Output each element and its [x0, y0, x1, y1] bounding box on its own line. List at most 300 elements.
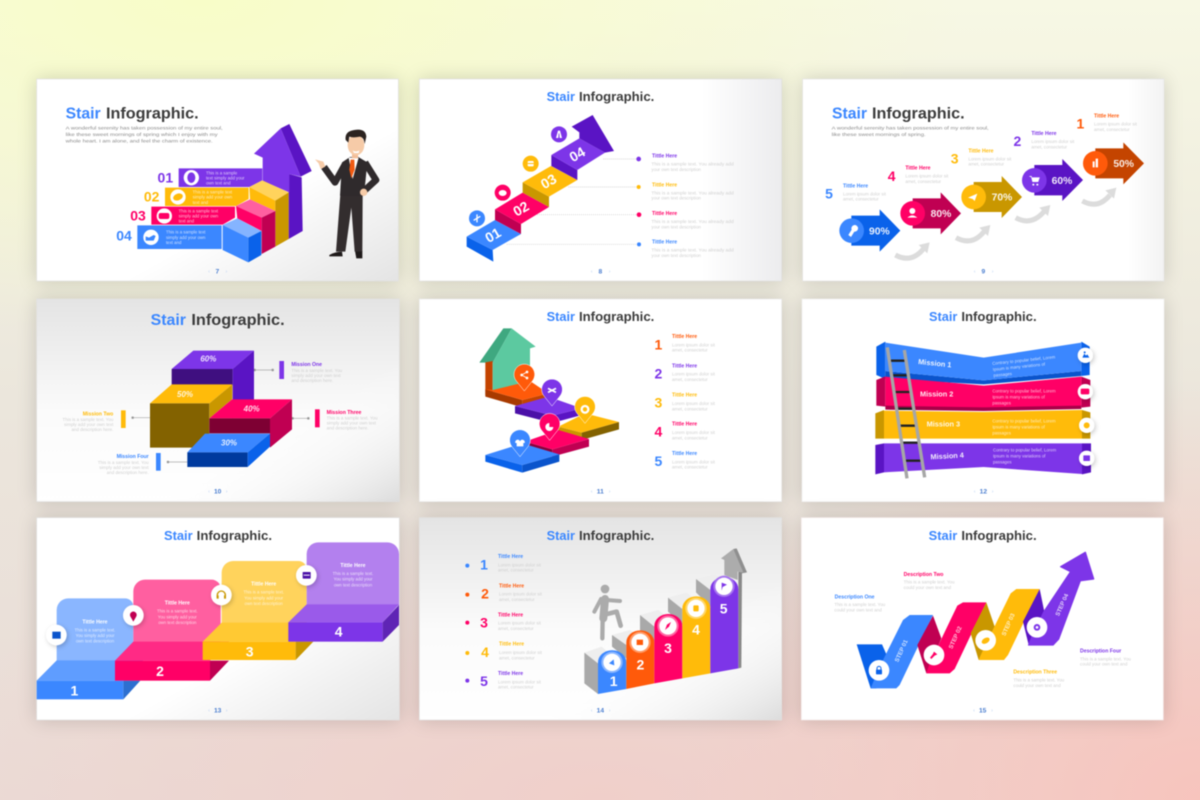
banner 03: text and — [179, 219, 195, 224]
label 2: Lorem ipsum dolor sit — [1031, 139, 1075, 144]
panel: slide 15 zigzag ribbon arrow — [801, 518, 1163, 720]
mission four: Mission Four — [117, 454, 149, 460]
3D block 40%: 40% — [243, 405, 260, 414]
page number: 9 — [981, 268, 985, 275]
label 3 — [951, 148, 1012, 167]
panel: slide 9 rising arrows — [803, 79, 1164, 281]
label 5: Tittle Here — [843, 183, 868, 189]
label 2: Tittle Here — [1031, 131, 1057, 137]
ribbon: mission 2: Contrary to popular belief, Lorem — [992, 388, 1056, 393]
item: purple: This is a sample text. You already add — [651, 162, 734, 167]
description three: could your own text and — [1013, 683, 1061, 688]
title — [547, 310, 654, 324]
banner 02: text and — [193, 200, 209, 205]
column 4 — [682, 596, 710, 678]
label 3: Tittle Here — [968, 148, 994, 154]
page number: › — [226, 708, 228, 714]
description text: A wonderful serenity has taken possession of my entire soul, — [832, 126, 989, 132]
step 2: This is a sample text. — [157, 609, 198, 614]
list item 3: amet, consectetur — [498, 626, 534, 631]
ribbon: mission 2: Mission 2 — [920, 389, 953, 398]
arrow 60%: 60% — [1052, 176, 1072, 187]
banner 04: This is a sample text — [166, 230, 206, 235]
mission one: simply add your own text — [291, 373, 341, 378]
title — [151, 312, 285, 329]
3D block 60% — [172, 351, 254, 418]
panel: slide 11 pin stairs — [419, 299, 782, 502]
ladder — [887, 347, 925, 478]
description text — [832, 126, 989, 138]
yellow step — [558, 413, 619, 440]
banner 01: 01 — [158, 170, 173, 186]
mission one — [279, 361, 343, 383]
page number: 8 — [598, 268, 602, 275]
arrow 90% — [839, 209, 900, 252]
title: Stair — [547, 310, 575, 324]
page number: 12 — [980, 488, 987, 495]
pink step — [525, 430, 589, 457]
ribbon: mission 4 — [875, 443, 1091, 474]
ribbon circle icons — [869, 617, 1047, 681]
item: blue: your own text description — [651, 253, 701, 258]
label 1: amet, consectetur — [1094, 127, 1130, 132]
curved grey arrows — [895, 188, 1116, 258]
purple step — [515, 397, 582, 423]
list item 2: 2 — [481, 585, 489, 601]
ribbon: mission 1: Mission 1 — [918, 357, 952, 369]
3D block 50%: 50% — [177, 390, 193, 399]
description two: Description Two — [904, 572, 943, 578]
list item 4: Lorem ipsum dolor sit — [672, 430, 716, 435]
list item 1: amet, consectetur — [498, 568, 534, 573]
title — [164, 529, 272, 543]
title: Stair — [547, 90, 575, 104]
step 4: own text description — [334, 582, 373, 587]
ribbon: mission 4: Contrary to popular belief, Lorem — [993, 448, 1057, 453]
3D block 60%: 60% — [200, 355, 216, 364]
page number: ‹ — [591, 269, 593, 275]
item: blue: This is a sample text. You already add — [651, 248, 734, 253]
title: Stair — [929, 310, 957, 324]
list item 2: amet, consectetur — [672, 377, 708, 382]
step 4: This is a sample text. — [333, 571, 373, 576]
circle icons — [46, 565, 317, 645]
step 3: 3 — [246, 643, 254, 659]
banner 03 — [130, 207, 235, 225]
mission three: and description here. — [327, 426, 369, 431]
arrow 70%: 70% — [992, 193, 1012, 204]
isometric stair with numbers: 02 — [510, 198, 532, 219]
list item 4: 4 — [654, 424, 662, 440]
step 4: You simply add your — [334, 577, 373, 582]
column 1 — [598, 650, 626, 694]
item: pink: This is a sample text. You already add — [651, 219, 734, 224]
ribbon step 03 — [971, 589, 1040, 660]
label 4: 4 — [888, 168, 896, 184]
banner 02: This is a sample text — [193, 190, 233, 195]
label 3: amet, consectetur — [968, 162, 1004, 167]
list item 4: 4 — [481, 644, 489, 660]
title: Infographic. — [191, 312, 285, 329]
connector lines — [507, 159, 639, 244]
panel: slide 7 stair with businessman — [37, 79, 398, 281]
list item 5: Lorem ipsum dolor sit — [498, 679, 542, 684]
step 3: own text description — [245, 601, 283, 606]
step 4: 4 — [335, 624, 343, 640]
list item 2: Tittle Here — [672, 363, 697, 369]
column 3: 3 — [664, 640, 672, 656]
label 5: amet, consectetur — [843, 197, 879, 202]
ribbon step 02: STEP 02 — [948, 625, 964, 650]
step 1: You simply add your — [76, 633, 115, 638]
list item 4: Tittle Here — [672, 422, 697, 428]
list item 3: Tittle Here — [498, 612, 523, 618]
3D block 40% — [209, 399, 292, 448]
3D block 30% — [187, 434, 270, 467]
page number — [591, 488, 611, 495]
page number: 10 — [214, 488, 222, 495]
mission two: Mission Two — [83, 411, 113, 417]
ribbon: mission 3: Mission 3 — [927, 420, 960, 429]
arrow 60% — [1022, 159, 1083, 201]
page number: 7 — [215, 268, 219, 275]
green arrow — [479, 328, 536, 395]
title: Infographic. — [961, 529, 1037, 543]
step 1: 1 — [70, 683, 78, 699]
label 2: amet, consectetur — [1031, 145, 1067, 150]
list item 4 — [654, 422, 716, 440]
panel: slide 8 diagonal stairs — [419, 79, 782, 281]
ribbon: mission 3: Contrary to popular belief, Lorem — [992, 419, 1056, 424]
title — [832, 105, 965, 122]
isometric stair with numbers: 01 — [482, 224, 504, 246]
mission three — [315, 409, 378, 431]
label 4: amet, consectetur — [905, 179, 941, 184]
list item 2 — [654, 363, 716, 382]
list item 5 — [465, 671, 542, 690]
ribbon step 01 — [857, 615, 933, 688]
list item 4: amet, consectetur — [499, 655, 535, 660]
mission three: simply add your own text — [327, 421, 377, 426]
3D block 50% — [150, 384, 232, 448]
description one — [834, 594, 886, 612]
businessman figure — [315, 130, 376, 258]
location pins — [510, 364, 595, 457]
ribbon: mission 2: passages — [992, 400, 1011, 405]
panel: slide 12 mission ribbons with ladder — [802, 299, 1164, 502]
title: Stair — [929, 529, 957, 543]
description one: could your own text and — [834, 607, 882, 612]
page number: › — [609, 708, 611, 714]
item: blue: Tittle Here — [652, 240, 677, 246]
title: Stair — [151, 312, 186, 329]
mission three: This is a sample text. You — [327, 416, 378, 421]
ribbon: mission 1: passages — [993, 371, 1012, 378]
step 1: own text description — [76, 639, 115, 644]
page number: ‹ — [591, 489, 593, 495]
title — [66, 105, 199, 122]
mission four: simply add your own text — [99, 465, 149, 470]
page number: ‹ — [973, 708, 975, 714]
mission two — [62, 410, 126, 432]
item: yellow — [637, 182, 734, 201]
label 3: 3 — [951, 150, 959, 166]
arrow 70% — [961, 176, 1022, 218]
title: Stair — [547, 529, 575, 543]
list item 2: Tittle Here — [499, 583, 524, 589]
page number — [208, 707, 228, 714]
list item 1: Lorem ipsum dolor sit — [498, 562, 542, 567]
page number: ‹ — [974, 489, 976, 495]
list item 3: Tittle Here — [672, 393, 697, 399]
page number: › — [225, 269, 227, 275]
item: pink: your own text description — [651, 224, 701, 229]
list item 5: Lorem ipsum dolor sit — [672, 459, 716, 464]
description three: This is a sample text. You — [1013, 678, 1065, 683]
list item 5: Tittle Here — [498, 671, 523, 677]
item: yellow: Tittle Here — [652, 182, 677, 188]
page number: › — [609, 269, 611, 275]
title — [929, 310, 1037, 324]
mission three: Mission Three — [327, 410, 361, 416]
page number: › — [992, 489, 994, 495]
page number — [208, 488, 228, 495]
ribbon: mission 1: Contrary to popular belief, Lorem — [992, 354, 1056, 366]
step 3: Tittle Here — [251, 582, 276, 588]
column 3 — [654, 614, 682, 683]
list item 5: 5 — [654, 453, 662, 469]
description four: This is a sample text. You — [1080, 656, 1131, 661]
mission one: and description here. — [291, 378, 333, 383]
step icons — [469, 126, 567, 226]
page number — [973, 707, 993, 714]
column 2: 2 — [636, 657, 644, 673]
description two: could your own text and — [904, 585, 952, 590]
ribbon step 04 arrow — [1023, 552, 1094, 645]
ribbon: mission 4: Mission 4 — [930, 451, 965, 461]
mission four: and description here. — [107, 470, 149, 475]
step 1: Tittle Here — [82, 619, 108, 625]
description one: This is a sample text. You — [834, 602, 886, 607]
ribbon: mission 1: Ipsum is many variations of — [993, 361, 1046, 372]
list item 3 — [465, 612, 542, 631]
title: Stair — [164, 529, 193, 543]
description text — [66, 126, 223, 145]
title: Stair — [832, 105, 867, 122]
panel: slide 13 card steps — [37, 518, 399, 720]
step 1 — [37, 598, 143, 699]
page number: › — [992, 269, 994, 275]
list item 5: amet, consectetur — [498, 685, 534, 690]
label 1: 1 — [1076, 115, 1084, 131]
list item 1: Tittle Here — [498, 554, 523, 560]
column 4: 4 — [692, 621, 700, 637]
title: Infographic. — [872, 105, 965, 122]
list item 4: amet, consectetur — [672, 435, 708, 440]
banner 03: simply add your own — [179, 214, 219, 219]
column 2 — [626, 630, 654, 689]
title: Infographic. — [579, 529, 654, 543]
list item 2: Lorem ipsum dolor sit — [499, 592, 543, 597]
list item 5 — [654, 451, 716, 470]
ribbon: mission 3: passages — [992, 431, 1011, 436]
page number — [974, 268, 994, 275]
step 2 — [115, 580, 229, 681]
ribbon: mission 2: Ipsum is many variations of — [992, 394, 1046, 399]
list item 2: 2 — [654, 365, 662, 381]
page number: › — [609, 489, 611, 495]
page number: 13 — [214, 707, 222, 714]
banner 01: This is a sample — [206, 170, 238, 175]
list item 3 — [654, 393, 716, 411]
page number — [591, 268, 611, 275]
pin icons — [515, 371, 588, 446]
grey stair walls and arrow — [584, 548, 747, 694]
title: Stair — [66, 105, 101, 122]
page number: 11 — [597, 488, 604, 495]
mission two: and description here. — [71, 427, 113, 432]
arrow 50% — [1083, 142, 1144, 184]
page number: › — [226, 489, 228, 495]
step 4: Tittle Here — [340, 563, 366, 569]
mission one: This is a sample text. You — [291, 368, 343, 373]
banner 03: This is a sample text — [179, 209, 219, 214]
step 4 — [288, 542, 399, 642]
list item 2 — [465, 583, 543, 602]
label 5: 5 — [825, 185, 833, 201]
title — [547, 90, 654, 104]
arrow 80%: 80% — [931, 209, 951, 220]
description four: could your own text and — [1080, 662, 1128, 667]
list item 4 — [465, 642, 543, 660]
label 3: Lorem ipsum dolor sit — [968, 156, 1012, 161]
description text: A wonderful serenity has taken possession of my entire soul, — [66, 126, 223, 132]
page number: ‹ — [208, 269, 210, 275]
page number: 14 — [597, 707, 604, 714]
climbing person — [594, 585, 621, 638]
ribbon: mission 4: Ipsum is many variations of — [993, 454, 1046, 459]
banner 01 — [158, 168, 262, 187]
ribbon: mission 3: Ipsum is many variations of — [992, 425, 1046, 430]
page number: › — [991, 708, 993, 714]
description three — [1013, 670, 1065, 688]
label 4: Tittle Here — [905, 166, 931, 172]
list item 1: Lorem ipsum dolor sit — [672, 342, 716, 347]
item: pink — [637, 211, 734, 229]
banner 02 — [144, 188, 249, 206]
list item 5: Tittle Here — [672, 451, 697, 457]
column 1: 1 — [610, 673, 618, 689]
item: purple: your own text description — [651, 167, 701, 172]
step 3: This is a sample text. — [243, 590, 284, 595]
label 1 — [1076, 114, 1138, 132]
item: yellow: This is a sample text. You already add — [651, 190, 734, 195]
ribbon: mission 4: passages — [993, 460, 1012, 465]
banner 01: text simply add your — [206, 176, 245, 181]
blue step — [485, 443, 559, 473]
page number: 15 — [979, 707, 987, 714]
list item 3: Lorem ipsum dolor sit — [498, 621, 542, 626]
column 5 — [710, 576, 738, 673]
description text: like these sweet mornings of spring. — [832, 132, 926, 138]
page number: ‹ — [208, 489, 210, 495]
isometric stair with numbers: 03 — [538, 170, 559, 192]
title: Infographic. — [961, 310, 1037, 324]
ribbon step 02 — [917, 602, 986, 673]
label 2: 2 — [1013, 133, 1021, 149]
ribbon step 04 arrow: STEP 04 — [1055, 593, 1071, 617]
description three: Description Three — [1013, 670, 1057, 676]
list item 1: 1 — [480, 556, 488, 572]
title — [547, 529, 654, 543]
isometric stair with numbers — [467, 115, 614, 262]
title: Infographic. — [579, 310, 654, 324]
3D block 30%: 30% — [221, 439, 237, 448]
list item 4: Tittle Here — [499, 642, 524, 648]
list item 3: 3 — [480, 615, 488, 631]
page number — [974, 488, 994, 495]
list item 2: Lorem ipsum dolor sit — [672, 372, 716, 377]
3D cube steps — [223, 180, 289, 262]
arrow 50%: 50% — [1113, 159, 1134, 170]
list item 2: amet, consectetur — [499, 597, 535, 602]
column 5: 5 — [720, 601, 728, 617]
banner 04: text and — [166, 240, 182, 245]
ribbon: mission 3 — [875, 410, 1090, 439]
step 2: 2 — [156, 663, 164, 679]
item: blue — [637, 240, 734, 258]
ribbon step 03: STEP 03 — [1001, 612, 1017, 637]
3D arrow — [254, 124, 312, 239]
banner 04: simply add your own — [166, 235, 206, 240]
list item 1: amet, consectetur — [672, 348, 708, 353]
page number — [591, 707, 611, 714]
label 4 — [888, 166, 949, 184]
list item 4: Lorem ipsum dolor sit — [499, 650, 543, 655]
item: purple — [636, 154, 734, 172]
banner 01: own text and — [206, 181, 231, 186]
step 2: You simply add your — [158, 614, 197, 619]
list item 3: Lorem ipsum dolor sit — [672, 401, 716, 406]
page number: ‹ — [591, 708, 593, 714]
description text: whole heart. I am alone, and feel the charm of existence. — [66, 139, 213, 145]
step 3: You simply add your — [244, 595, 284, 600]
mission four: This is a sample text. You — [98, 460, 149, 465]
label 2 — [1013, 131, 1075, 150]
label 4: Lorem ipsum dolor sit — [905, 174, 949, 179]
title — [929, 529, 1037, 543]
mission one: Mission One — [291, 362, 322, 368]
item: purple: Tittle Here — [652, 154, 677, 160]
banner 03: 03 — [130, 207, 146, 223]
label 1: Tittle Here — [1094, 114, 1119, 120]
label 5 — [825, 183, 887, 202]
mission two: This is a sample text. You — [62, 417, 114, 422]
step 3 — [203, 561, 313, 660]
description one: Description One — [835, 594, 875, 600]
list item 3: amet, consectetur — [672, 406, 708, 411]
list item 1: 1 — [654, 336, 662, 352]
mission two: simply add your own text — [64, 422, 114, 427]
page number: ‹ — [974, 269, 976, 275]
ribbon step 01: STEP 01 — [894, 639, 910, 663]
panel: slide 10 percentage blocks — [37, 299, 399, 502]
step 2: Tittle Here — [165, 601, 190, 607]
list item 3: 3 — [654, 395, 662, 411]
title: Infographic. — [197, 529, 272, 543]
right circle icons — [1078, 348, 1094, 466]
ribbon: mission 2 — [876, 376, 1090, 411]
